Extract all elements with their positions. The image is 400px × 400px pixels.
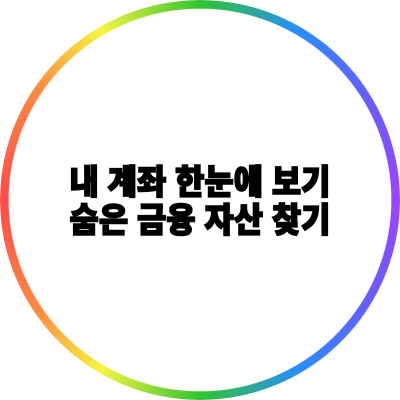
title line 2: 숨은 금융 자산 찾기 [70, 201, 330, 239]
title line 1: 내 계좌 한눈에 보기 [70, 163, 330, 201]
